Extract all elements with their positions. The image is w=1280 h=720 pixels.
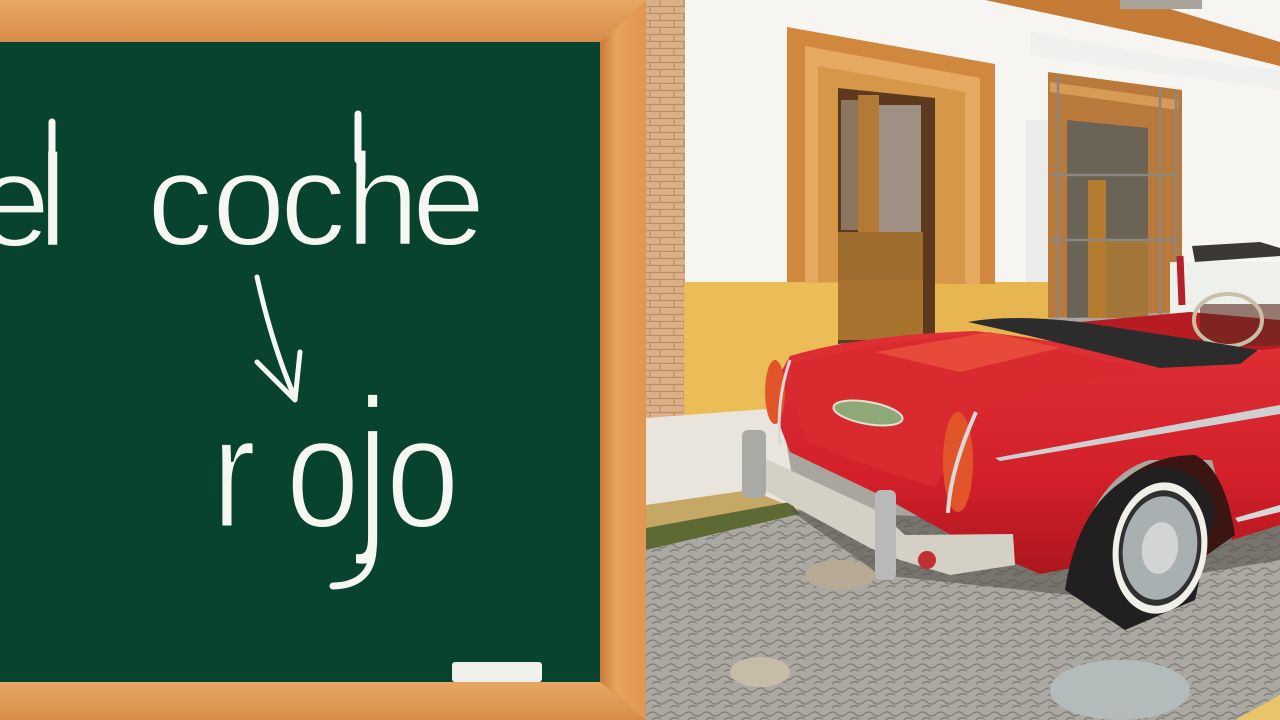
- red interior and windshield: [1080, 242, 1280, 350]
- wooden frame backing: [0, 0, 646, 720]
- cobblestone street: [646, 514, 1280, 720]
- chalk word: coche: coche: [147, 126, 485, 273]
- roof eave: [985, 0, 1280, 66]
- car body: [768, 331, 1280, 574]
- wheel arch: [1105, 455, 1235, 560]
- wooden frame top: [0, 0, 646, 42]
- shadow under car: [790, 500, 1280, 595]
- chrome side trim: [995, 405, 1280, 461]
- panel: chalkboard: [0, 0, 646, 720]
- white building wall: [685, 0, 1280, 300]
- chalk word: rojo: roo: [212, 384, 459, 561]
- door frame: [787, 27, 995, 284]
- chalk word: rojo: j: [355, 361, 387, 567]
- chalkboard surface: [0, 42, 600, 682]
- railing on roof: [1120, 0, 1202, 9]
- yellow wall base: [684, 282, 840, 420]
- sidewalk: [646, 408, 800, 522]
- wooden door: [838, 88, 935, 344]
- trunk highlight: [875, 332, 1060, 372]
- chalk eraser: [452, 662, 542, 682]
- wooden frame bottom: [0, 682, 646, 720]
- trunk lid: [790, 335, 1150, 487]
- chrome bumper: [742, 430, 1015, 580]
- kerb: [646, 490, 800, 530]
- chalk arrow: [257, 277, 300, 400]
- trunk emblem: [832, 396, 904, 430]
- panel: photo of red car on a street: [645, 0, 1280, 720]
- wooden frame right: [600, 4, 646, 716]
- brick pilaster: [645, 0, 687, 418]
- rear wheel: [1065, 467, 1216, 630]
- tail lights: [765, 360, 976, 513]
- folded black soft top: [968, 318, 1258, 368]
- barred window: [1048, 72, 1182, 318]
